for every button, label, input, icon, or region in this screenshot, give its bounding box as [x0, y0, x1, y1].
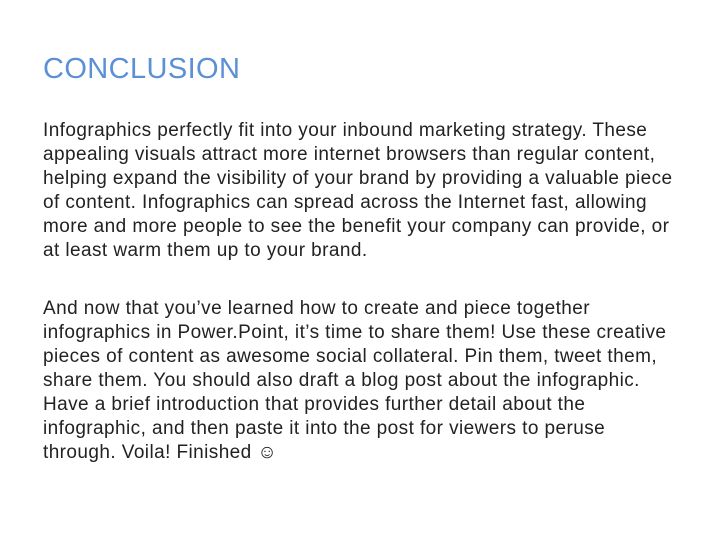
text block: paragraph 2	[43, 298, 666, 463]
text block: paragraph 1	[43, 120, 673, 261]
title: CONCLUSION	[43, 53, 240, 85]
text block: paragraph 1: more and more people to see the benefit your company can provide, or	[43, 216, 669, 237]
text block: paragraph 1: of content. Infographics can spread across the Internet fast, allowing	[43, 192, 647, 213]
text block: paragraph 1: helping expand the visibility of your brand by providing a valuable piece	[43, 168, 673, 189]
text block: paragraph 2: share them. You should also draft a blog post about the infographic.	[43, 370, 640, 391]
text block: paragraph 2: And now that you’ve learned how to create and piece together	[43, 298, 590, 319]
text block: paragraph 1: at least warm them up to your brand.	[43, 240, 368, 261]
text block: paragraph 2: infographics in Power.Point, it’s time to share them! Use these creative	[43, 322, 666, 343]
text block: paragraph 1: Infographics perfectly fit into your inbound marketing strategy. These	[43, 120, 647, 141]
text block: paragraph 2: infographic, and then paste it into the post for viewers to peruse	[43, 418, 605, 439]
text block: paragraph 1: appealing visuals attract more internet browsers than regular content,	[43, 144, 655, 165]
text block: paragraph 2: Have a brief introduction that provides further detail about the	[43, 394, 585, 415]
text block: paragraph 2: pieces of content as awesome social collateral. Pin them, tweet them,	[43, 346, 657, 367]
text block: paragraph 2: through. Voila! Finished ☺	[43, 442, 277, 463]
